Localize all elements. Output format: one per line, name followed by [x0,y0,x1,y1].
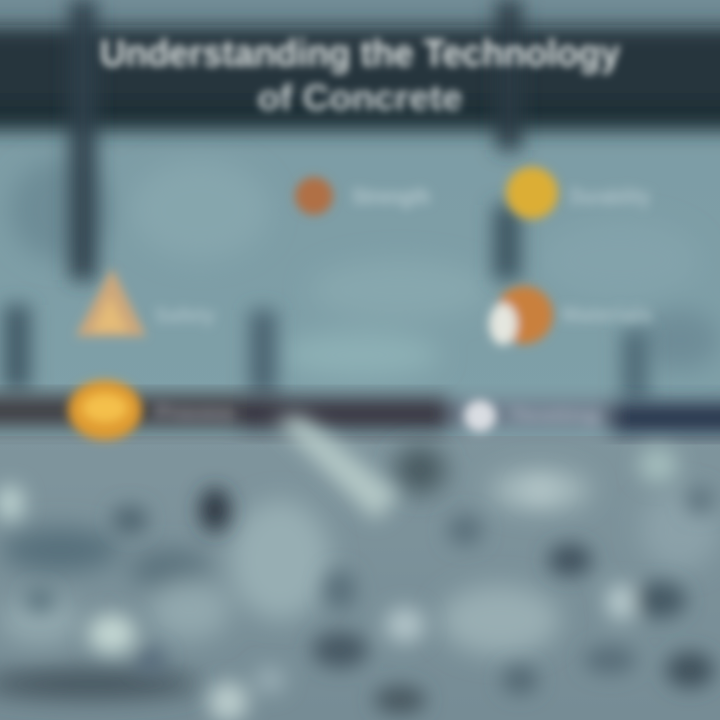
background posts [4,0,648,400]
title: of Concrete [258,77,462,118]
icon: split orange and white circle [489,286,553,345]
label: amber circle: Process [155,400,235,425]
icon: yellow circle [506,167,558,219]
rubble foreground [0,415,720,720]
label: warning triangle: Safety [155,305,216,327]
header band [0,26,720,130]
icon: white circle [464,400,496,432]
label: white circle: Testing [510,405,600,427]
label: yellow circle: Durability [570,184,651,209]
title [100,33,620,118]
dark horizontal band [0,396,720,433]
label: orange circle: Strength [352,184,430,209]
label: split circle: Materials [562,302,652,327]
mid panel tonal patches [10,160,720,377]
title: Understanding the Technology [100,33,620,75]
icon: orange circle [295,177,333,215]
icon: large amber circle [68,380,142,440]
icon: warning triangle [76,268,146,336]
